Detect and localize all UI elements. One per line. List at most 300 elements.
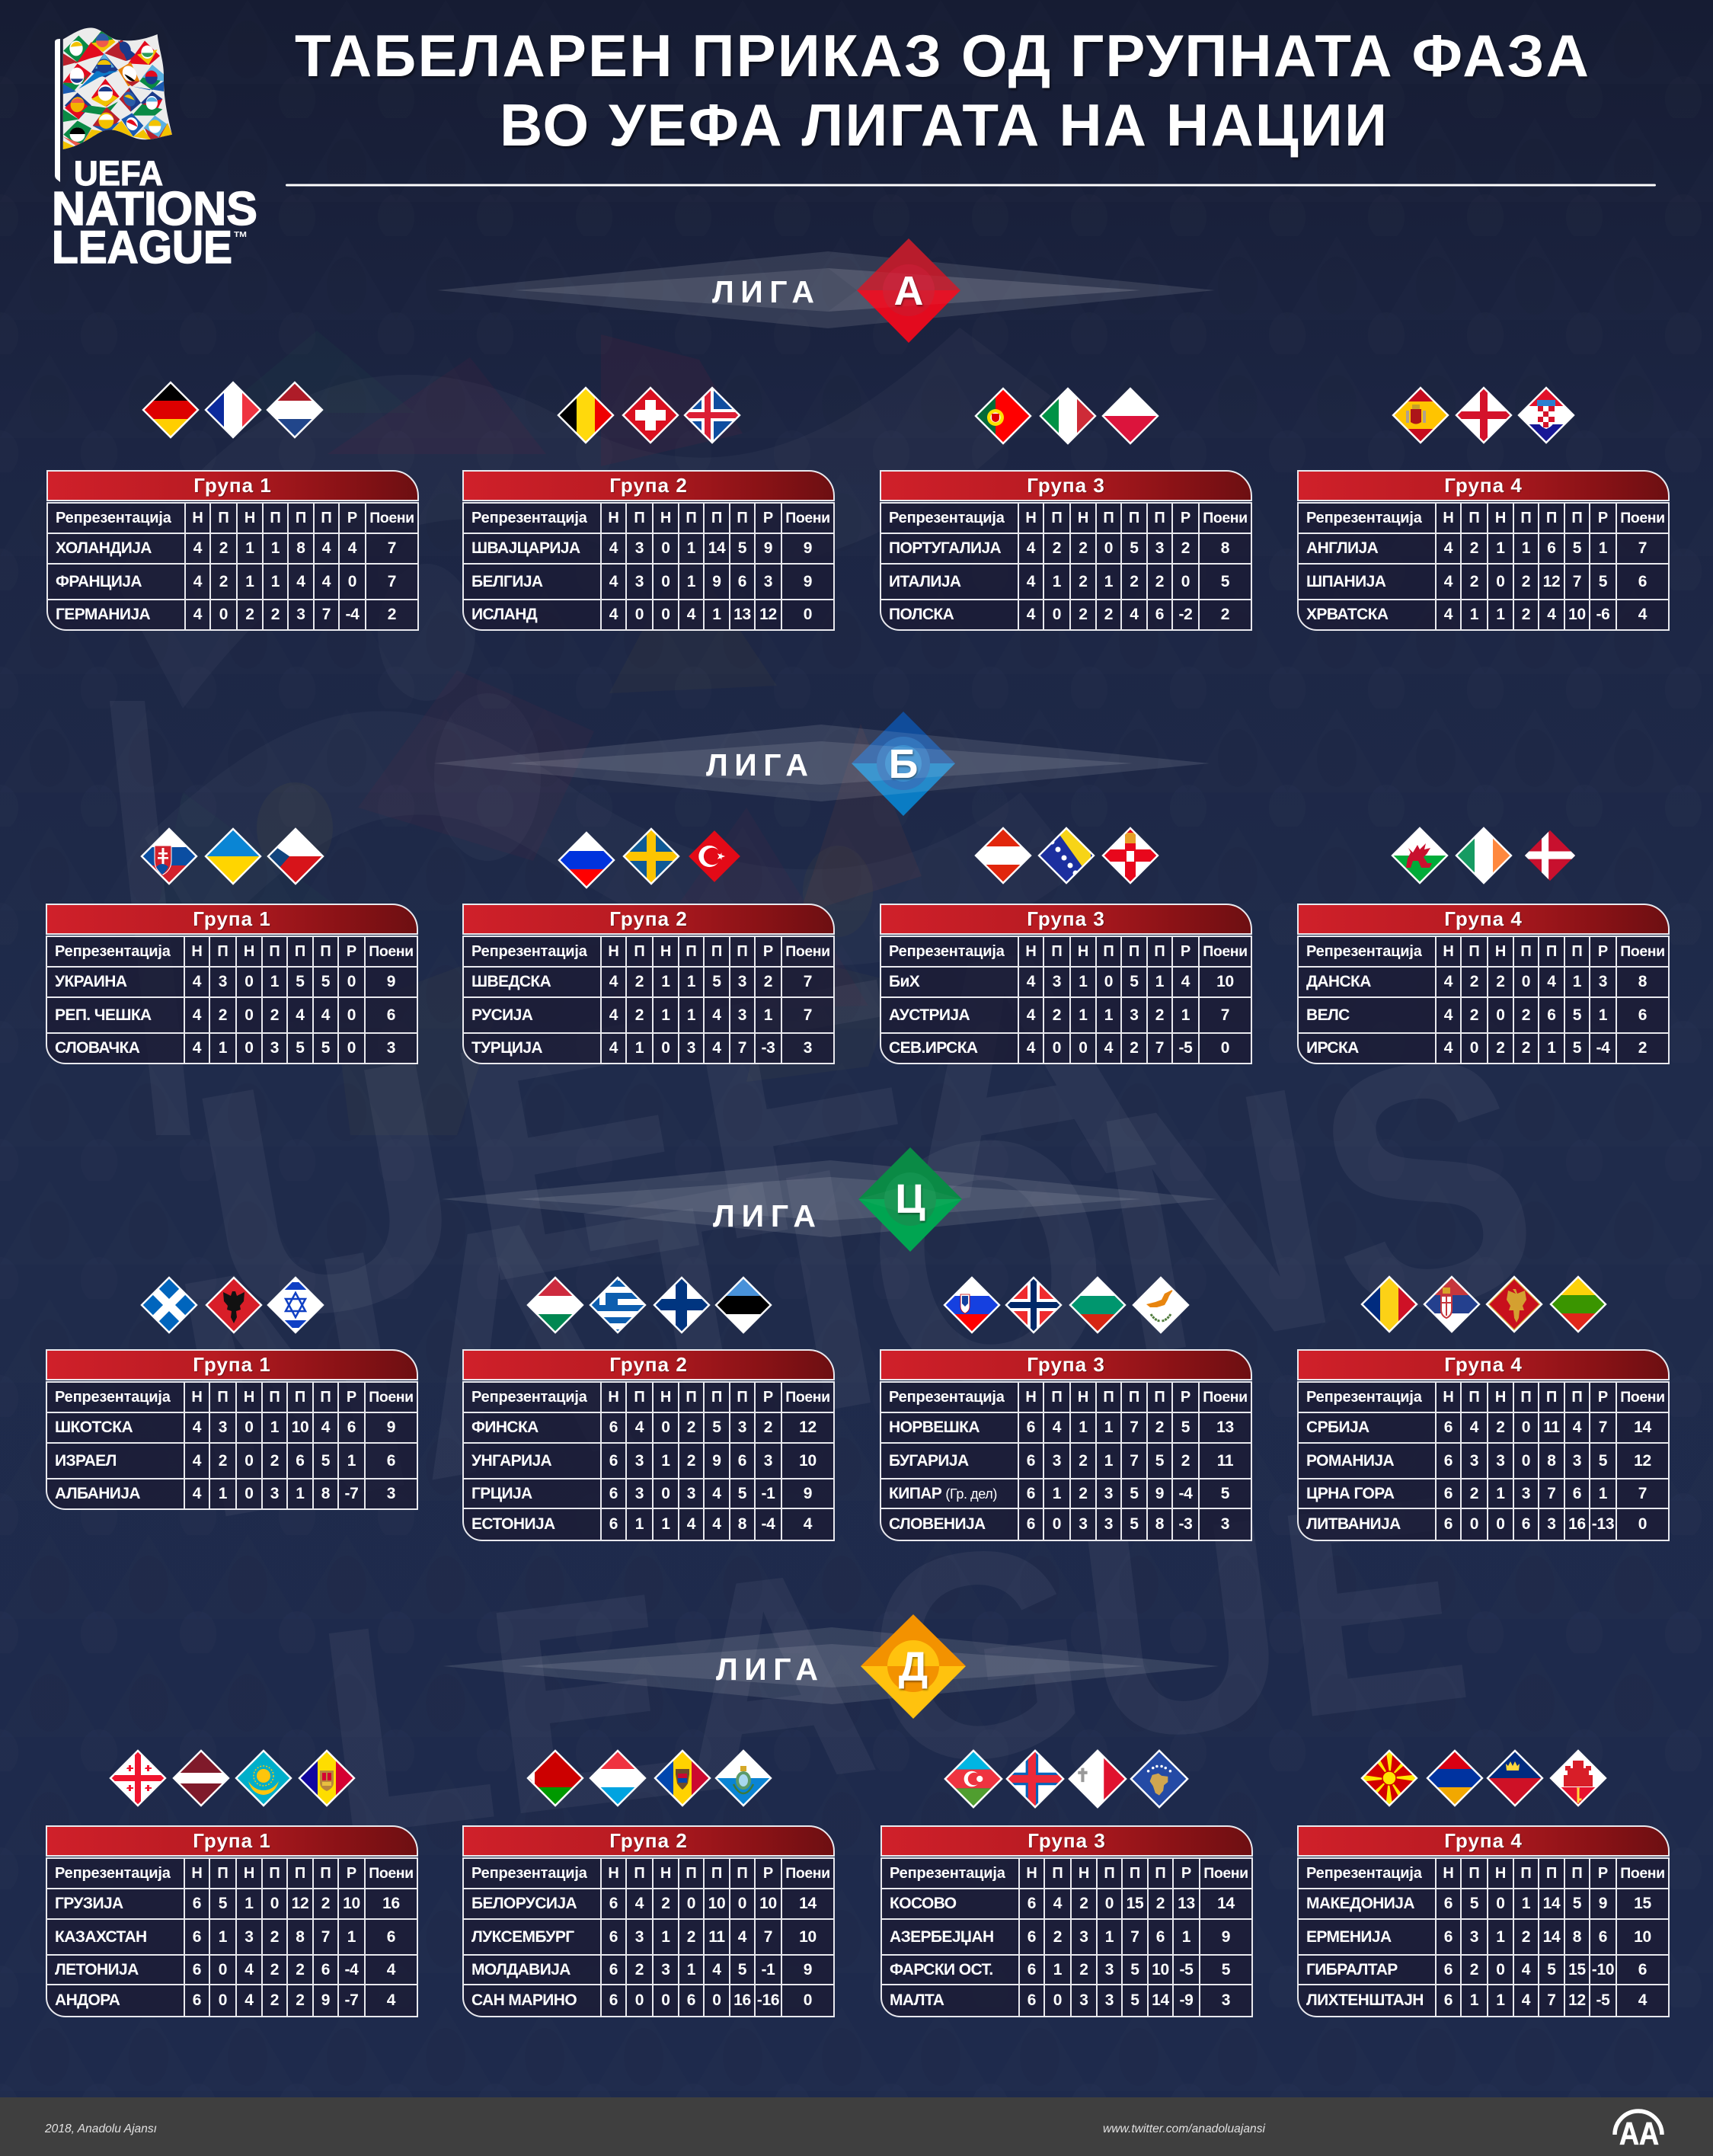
standings grid: 3 — [1079, 1515, 1088, 1533]
standings grid: Н — [1495, 1865, 1506, 1882]
standings grid: -16 — [757, 1991, 779, 2009]
standings grid: Поени — [369, 1865, 414, 1882]
table: league D group 3 — [880, 1825, 1253, 2017]
league C banner — [442, 1147, 1217, 1252]
standings grid: 4 — [387, 1961, 395, 1978]
flags: league B group 3 — [973, 825, 1161, 886]
standings grid: 6 — [1599, 1927, 1607, 1946]
standings grid: 2 — [296, 1991, 305, 2009]
standings grid: 2 — [270, 1006, 279, 1024]
standings grid: П — [1469, 943, 1480, 960]
standings grid: 2 — [1155, 1419, 1164, 1436]
standings grid: 3 — [764, 1452, 772, 1469]
standings grid: ГРЦИЈА — [471, 1484, 532, 1502]
standings grid: 2 — [1470, 973, 1478, 990]
standings grid: 10 — [1216, 973, 1234, 990]
standings grid: 0 — [1496, 1961, 1505, 1978]
league label: ЛИГА — [713, 1198, 816, 1233]
standings grid: 9 — [804, 1961, 812, 1978]
standings grid: 0 — [244, 973, 254, 990]
standings grid: 13 — [1216, 1419, 1234, 1436]
standings grid — [46, 502, 419, 631]
standings grid: АЛБАНИЈА — [55, 1485, 140, 1502]
standings grid: 5 — [1130, 1484, 1139, 1502]
flags: league A group 1 — [140, 379, 325, 440]
standings grid: 0 — [804, 1991, 812, 2009]
standings grid: 1 — [1105, 1927, 1114, 1946]
standings grid: 6 — [193, 1895, 201, 1912]
standings grid: П — [1546, 1388, 1557, 1405]
standings grid: 1 — [1079, 973, 1088, 990]
standings grid: 4 — [193, 1039, 201, 1057]
standings grid: 9 — [321, 1991, 330, 2009]
standings grid: 3 — [635, 1452, 644, 1469]
standings grid: 6 — [609, 1419, 618, 1436]
standings grid: 6 — [1444, 1991, 1453, 2009]
standings grid: 3 — [219, 1419, 227, 1436]
standings grid: 1 — [764, 1006, 772, 1024]
icon: flag Moldova — [652, 1748, 713, 1809]
standings grid: Р — [1598, 943, 1608, 960]
standings grid: 16 — [1568, 1515, 1586, 1533]
standings grid: 1 — [1104, 1419, 1113, 1436]
standings grid: ФРАНЦИЈА — [56, 573, 142, 590]
icon: flag Netherlands — [264, 379, 325, 440]
standings grid: ГЕРМАНИЈА — [56, 606, 150, 623]
group heading: Група 2 — [609, 474, 688, 497]
standings grid: 14 — [1543, 1895, 1560, 1912]
standings grid: 6 — [193, 1927, 201, 1946]
watermark: flag pattern — [110, 328, 1082, 1135]
standings grid: Р — [1181, 1865, 1191, 1882]
standings grid: 0 — [1104, 973, 1113, 990]
icon: flag Lithuania — [1548, 1274, 1609, 1335]
standings grid: 1 — [347, 1452, 356, 1469]
standings grid: 7 — [1599, 1419, 1607, 1436]
standings grid: 4 — [193, 1419, 201, 1436]
standings grid: 7 — [388, 573, 396, 590]
standings grid: 10 — [292, 1419, 308, 1436]
standings grid — [462, 1381, 835, 1541]
standings grid: 4 — [1573, 1419, 1581, 1436]
standings grid: 2 — [1470, 1484, 1478, 1502]
standings grid: 8 — [321, 1485, 330, 1502]
icon: flag France — [203, 379, 264, 440]
group heading: Група 4 — [1444, 474, 1523, 497]
flags: league D group 3 — [942, 1748, 1190, 1810]
standings grid: -6 — [1596, 606, 1610, 623]
standings grid: 0 — [1496, 1006, 1505, 1024]
standings grid: 6 — [1027, 1515, 1035, 1533]
table: league C group 4 — [1297, 1349, 1670, 1541]
standings grid: 3 — [738, 1419, 746, 1436]
standings grid: 1 — [1599, 539, 1607, 557]
standings grid: 8 — [296, 1927, 305, 1946]
watermark: UEFA NATIONS LEAGUE lettering — [152, 865, 1561, 1898]
standings grid: Н — [660, 1388, 671, 1405]
standings grid: П — [1103, 1388, 1114, 1405]
standings grid: 8 — [1547, 1452, 1556, 1469]
standings grid: ВЕЛС — [1306, 1006, 1350, 1024]
standings grid: 1 — [661, 1515, 670, 1533]
table: league B group 1 — [46, 904, 418, 1064]
standings grid: 3 — [1104, 1484, 1113, 1502]
standings grid: 7 — [388, 539, 396, 557]
standings grid: 1 — [219, 1927, 227, 1946]
standings grid: П — [321, 509, 332, 526]
standings grid: 8 — [1573, 1927, 1581, 1946]
standings grid: П — [634, 509, 645, 526]
icon: flag Faroe Islands — [1004, 1748, 1066, 1810]
group heading: Група 1 — [193, 907, 271, 930]
standings grid: 4 — [635, 1895, 644, 1912]
standings grid: 5 — [1599, 1452, 1607, 1469]
standings grid: -5 — [1596, 1991, 1610, 2009]
group heading: Група 2 — [609, 1353, 688, 1376]
standings grid: 3 — [764, 573, 772, 590]
icon: flag Slovakia — [139, 826, 200, 887]
standings grid: 4 — [1181, 973, 1190, 990]
standings grid: 1 — [1079, 1419, 1088, 1436]
group heading — [1297, 904, 1670, 935]
standings grid: ХРВАТСКА — [1306, 606, 1388, 623]
standings grid: 2 — [1496, 1419, 1505, 1436]
standings grid: Поени — [785, 509, 830, 526]
standings grid: 4 — [321, 1006, 330, 1024]
standings grid: 7 — [1221, 1006, 1229, 1024]
icon: flag San Marino — [713, 1748, 774, 1809]
icon: flag Malta — [1066, 1748, 1129, 1810]
standings grid: 3 — [296, 606, 305, 623]
standings grid: 7 — [1573, 573, 1581, 590]
standings grid: ШВАЈЦАРИЈА — [471, 539, 580, 557]
standings grid: 9 — [804, 573, 812, 590]
standings grid: 1 — [245, 539, 254, 557]
standings grid: Поени — [369, 943, 414, 960]
standings grid: П — [1129, 1388, 1139, 1405]
standings grid: 0 — [244, 1039, 254, 1057]
icon: flag Serbia — [1421, 1274, 1482, 1335]
standings grid: 0 — [348, 573, 356, 590]
icon: logo wavy flag — [61, 25, 175, 152]
standings grid: 2 — [1079, 1961, 1088, 1978]
standings grid: 4 — [193, 539, 202, 557]
standings grid: Р — [347, 943, 356, 960]
standings grid: П — [686, 1865, 697, 1882]
standings grid: Поени — [1620, 509, 1665, 526]
group heading: Група 3 — [1027, 907, 1105, 930]
standings grid: Н — [1079, 1865, 1089, 1882]
standings grid: 2 — [1181, 1452, 1190, 1469]
standings grid: 3 — [1470, 1927, 1478, 1946]
standings grid — [880, 502, 1252, 631]
standings grid: 10 — [1152, 1961, 1169, 1978]
standings grid: 5 — [296, 973, 305, 990]
standings grid: Поени — [369, 509, 414, 526]
standings grid: 1 — [712, 606, 721, 623]
standings grid: 10 — [1634, 1927, 1651, 1946]
title line 1: ТАБЕЛАРЕН ПРИКАЗ ОД ГРУПНАТА ФАЗА — [295, 22, 1589, 89]
standings grid: П — [270, 509, 281, 526]
standings grid: Репрезентација — [471, 1865, 587, 1882]
standings grid: 2 — [1522, 573, 1530, 590]
standings grid: Репрезентација — [55, 1865, 171, 1882]
standings grid: 6 — [387, 1452, 395, 1469]
standings grid: 1 — [1181, 1006, 1190, 1024]
icon: flag Portugal — [973, 385, 1034, 446]
standings grid: РЕП. ЧЕШКА — [55, 1006, 152, 1024]
standings grid: 5 — [1181, 1419, 1190, 1436]
standings grid — [462, 1857, 835, 2017]
standings grid: П — [686, 1388, 697, 1405]
standings grid: 6 — [609, 1484, 618, 1502]
standings grid: 4 — [712, 1039, 721, 1057]
standings grid: -4 — [761, 1515, 775, 1533]
icon: flag Germany — [140, 379, 201, 440]
standings grid: 2 — [1079, 1895, 1088, 1912]
standings grid: П — [711, 1388, 722, 1405]
standings grid: 0 — [687, 1895, 695, 1912]
standings grid: 2 — [635, 973, 644, 990]
standings grid: 4 — [712, 1484, 721, 1502]
standings grid: 12 — [799, 1419, 817, 1436]
icon: Anadolu Agency logo: AA — [1619, 2116, 1659, 2151]
standings grid: 8 — [738, 1515, 746, 1533]
standings grid — [1297, 936, 1670, 1064]
standings grid: 1 — [1104, 573, 1113, 590]
icon: flag Albania — [203, 1275, 264, 1336]
standings grid: 3 — [1053, 1452, 1061, 1469]
standings grid: 1 — [1079, 1006, 1088, 1024]
group heading — [1297, 1349, 1670, 1380]
standings grid: 6 — [1547, 1006, 1556, 1024]
standings grid — [1297, 1381, 1670, 1541]
standings grid: БиХ — [889, 973, 919, 990]
badge: B — [852, 712, 955, 816]
standings grid: П — [634, 943, 645, 960]
standings grid: 0 — [1053, 1991, 1062, 2009]
standings grid: -9 — [1179, 1991, 1194, 2009]
standings grid: 3 — [1053, 973, 1061, 990]
standings grid: 2 — [219, 1452, 227, 1469]
standings grid: 4 — [609, 1039, 618, 1057]
group heading — [46, 470, 419, 501]
standings grid: 2 — [1053, 539, 1061, 557]
icon: flag Russia — [556, 830, 617, 891]
footer link text: www.twitter.com/anadoluajansi — [1103, 2122, 1266, 2135]
standings grid: 0 — [661, 539, 670, 557]
standings grid: АНГЛИЈА — [1306, 539, 1378, 557]
standings grid: 5 — [321, 973, 330, 990]
standings grid: УКРАИНА — [55, 973, 126, 990]
standings grid: 6 — [1156, 1927, 1165, 1946]
standings grid: 1 — [687, 1961, 695, 1978]
standings grid: 5 — [1221, 1484, 1229, 1502]
group heading: Група 3 — [1027, 1353, 1105, 1376]
icon: flag Poland — [1100, 385, 1161, 446]
flags: league B group 4 — [1389, 825, 1578, 886]
standings grid: 11 — [1217, 1452, 1233, 1469]
standings grid: 6 — [1027, 1484, 1035, 1502]
standings grid: 11 — [708, 1927, 725, 1946]
standings grid: 1 — [271, 573, 280, 590]
standings grid: 1 — [1496, 1991, 1505, 2009]
standings grid: 6 — [387, 1927, 395, 1946]
standings grid: 2 — [1079, 573, 1088, 590]
standings grid: П — [1469, 1865, 1480, 1882]
standings grid: 10 — [799, 1452, 817, 1469]
standings grid: П — [711, 943, 722, 960]
standings grid: П — [269, 1388, 280, 1405]
standings grid: 5 — [1221, 573, 1229, 590]
standings grid: ШПАНИЈА — [1306, 573, 1385, 590]
standings grid: Р — [1181, 943, 1190, 960]
standings grid: 12 — [1568, 1991, 1586, 2009]
standings grid: 3 — [1496, 1452, 1505, 1469]
badge letter: Д — [899, 1644, 928, 1690]
standings grid: 3 — [1599, 973, 1607, 990]
standings grid: 4 — [1547, 973, 1556, 990]
standings grid: 6 — [738, 573, 746, 590]
standings grid: 3 — [270, 1485, 279, 1502]
standings grid: 6 — [193, 1991, 201, 2009]
group heading: Група 4 — [1444, 1829, 1523, 1852]
footer source text: 2018, Anadolu Ajansı — [44, 2122, 157, 2135]
standings grid: Н — [660, 1865, 671, 1882]
standings grid: 6 — [687, 1991, 695, 2009]
standings grid: 10 — [799, 1927, 817, 1946]
standings grid: 3 — [661, 1961, 670, 1978]
standings grid: Н — [1443, 943, 1454, 960]
standings grid: Н — [660, 509, 671, 526]
standings grid: 2 — [219, 1006, 227, 1024]
group heading — [462, 470, 835, 501]
standings grid: 6 — [609, 1961, 618, 1978]
standings grid: 14 — [799, 1895, 817, 1912]
standings grid: -1 — [761, 1961, 775, 1978]
standings grid: КОСОВО — [890, 1895, 957, 1912]
standings grid: 2 — [219, 573, 228, 590]
standings grid: 7 — [738, 1039, 746, 1057]
rays — [443, 1627, 1219, 1704]
standings grid: 2 — [270, 1961, 279, 1978]
standings grid: 4 — [1027, 973, 1035, 990]
standings grid: 5 — [738, 1484, 746, 1502]
standings grid: -4 — [345, 606, 360, 623]
standings grid: 2 — [270, 1991, 279, 2009]
standings grid: П — [295, 943, 305, 960]
standings grid: Н — [608, 1865, 619, 1882]
icon: flag Luxembourg — [587, 1748, 648, 1809]
standings grid: 5 — [296, 1039, 305, 1057]
group heading — [46, 1825, 418, 1857]
standings grid: 2 — [1496, 1039, 1505, 1057]
standings grid: Р — [1598, 509, 1608, 526]
standings grid: 1 — [347, 1927, 356, 1946]
standings grid: 6 — [1638, 1006, 1647, 1024]
standings grid: ЛИТВАНИЈА — [1306, 1515, 1401, 1533]
logo text: NATIONS: NATIONS — [52, 183, 257, 235]
standings grid: Н — [244, 1388, 254, 1405]
standings grid: 1 — [635, 1515, 644, 1533]
standings grid: 3 — [1221, 1515, 1229, 1533]
standings grid: Н — [660, 943, 671, 960]
standings grid: 2 — [1522, 1039, 1530, 1057]
standings grid: ХОЛАНДИЈА — [56, 539, 152, 557]
watermark: UEFA NATIONS LEAGUE lettering: NATIONS — [152, 978, 1561, 1592]
standings grid: 2 — [1079, 539, 1088, 557]
group heading: Група 1 — [193, 1353, 271, 1376]
standings grid: 2 — [1053, 1927, 1062, 1946]
standings grid: Репрезентација — [471, 1388, 587, 1405]
standings grid: 4 — [1027, 606, 1035, 623]
icon: flag Denmark — [1522, 827, 1578, 884]
standings grid: 3 — [1105, 1991, 1114, 2009]
standings grid: Р — [1181, 1388, 1190, 1405]
standings grid: 16 — [382, 1895, 400, 1912]
standings grid: 6 — [387, 1006, 395, 1024]
standings grid: 4 — [609, 539, 618, 557]
standings grid: Н — [1025, 943, 1037, 960]
standings grid: 0 — [1496, 1895, 1505, 1912]
standings grid: 0 — [244, 1419, 254, 1436]
standings grid: 3 — [1079, 1927, 1088, 1946]
group heading — [1297, 470, 1670, 501]
standings grid: -2 — [1178, 606, 1193, 623]
standings grid: П — [217, 943, 229, 960]
standings grid: 0 — [1079, 1039, 1088, 1057]
standings grid: 1 — [1470, 1991, 1478, 2009]
standings grid: 0 — [347, 973, 356, 990]
standings grid: 4 — [712, 1006, 721, 1024]
standings grid: -4 — [1178, 1484, 1193, 1502]
standings grid: 0 — [1181, 573, 1190, 590]
standings grid: Р — [763, 509, 773, 526]
standings grid: 5 — [1130, 973, 1139, 990]
standings grid: П — [1571, 1865, 1583, 1882]
standings grid: 2 — [1155, 573, 1164, 590]
standings grid: Поени — [1620, 1865, 1665, 1882]
standings grid: 4 — [1444, 539, 1453, 557]
standings grid: 1 — [1573, 973, 1581, 990]
standings grid: Н — [1443, 509, 1454, 526]
standings grid: ПОЛСКА — [889, 606, 954, 623]
standings grid: 0 — [1470, 1515, 1478, 1533]
group heading — [880, 470, 1252, 501]
icon: flag Estonia — [713, 1275, 774, 1336]
standings grid: П — [1051, 509, 1063, 526]
standings grid: СРБИЈА — [1306, 1419, 1369, 1436]
standings grid: 6 — [1027, 1961, 1036, 1978]
group heading — [462, 904, 835, 935]
standings grid: 1 — [1522, 539, 1530, 557]
standings grid: Репрезентација — [471, 943, 587, 960]
standings grid: П — [1130, 1865, 1140, 1882]
standings grid: 5 — [1130, 539, 1139, 557]
standings grid: Р — [1598, 1388, 1608, 1405]
standings grid: 9 — [387, 1419, 395, 1436]
standings grid: П — [1051, 1388, 1063, 1405]
standings grid: ГРУЗИЈА — [55, 1895, 123, 1912]
standings grid: АУСТРИЈА — [889, 1006, 970, 1024]
standings grid: СЛОВАЧКА — [55, 1039, 139, 1057]
standings grid: 5 — [1547, 1961, 1556, 1978]
standings grid: 1 — [687, 573, 695, 590]
standings grid: Поени — [1203, 509, 1248, 526]
standings grid: 7 — [1547, 1991, 1556, 2009]
standings grid: 12 — [759, 606, 777, 623]
standings grid: 8 — [1221, 539, 1229, 557]
